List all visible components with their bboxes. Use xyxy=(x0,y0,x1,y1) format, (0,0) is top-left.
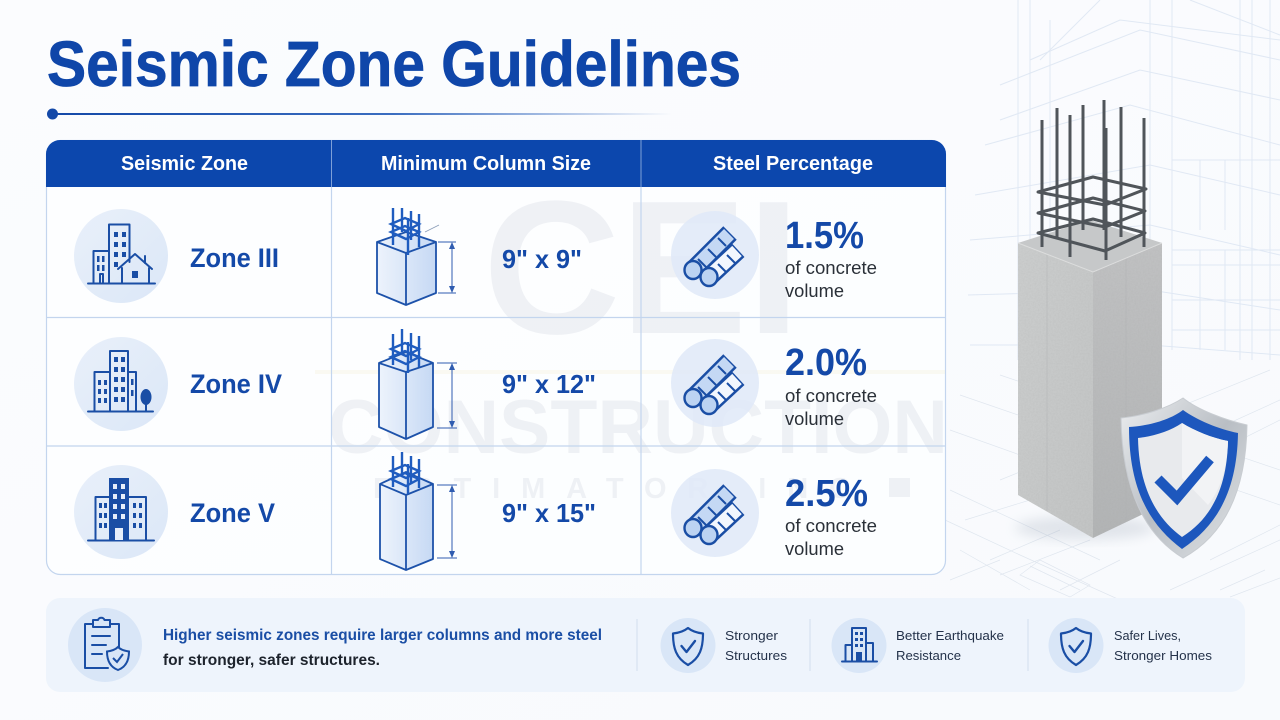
benefit: better earthquake resistance: Better Earthquake xyxy=(896,628,1004,643)
background: blueprint floor xyxy=(945,370,1280,600)
table header: Steel Percentage xyxy=(713,153,873,175)
icon: zone IV buildings xyxy=(74,337,168,431)
watermark: CONSTRUCTION xyxy=(328,385,948,470)
icon: column 9 x 12 xyxy=(379,329,457,439)
steel percentage: 1.5% xyxy=(785,215,864,257)
watermark xyxy=(315,162,948,505)
column size: 9" x 9" xyxy=(502,244,582,274)
icon: steel bars xyxy=(671,469,759,557)
icon: clipboard with shield xyxy=(68,608,142,682)
benefit: stronger structures: Stronger xyxy=(725,628,779,643)
icon: column 9 x 15 xyxy=(380,452,457,570)
zone label: Zone IV xyxy=(190,369,282,399)
icon: steel bars xyxy=(671,339,759,427)
illustration: concrete column with rebar xyxy=(1015,100,1162,540)
row: Zone III xyxy=(74,208,877,305)
watermark: CEI xyxy=(483,162,800,374)
column size: 9" x 15" xyxy=(502,498,596,528)
table header xyxy=(46,140,946,187)
steel percentage: volume xyxy=(785,409,844,429)
table header: Seismic Zone xyxy=(121,153,248,175)
column size: 9" x 12" xyxy=(502,369,596,399)
background: building wireframe xyxy=(968,0,1280,360)
steel percentage: 2.5% xyxy=(785,473,868,515)
icon: steel bars xyxy=(671,211,759,299)
icon: zone V buildings xyxy=(74,465,168,559)
steel percentage: of concrete xyxy=(785,258,877,278)
benefit: better earthquake resistance xyxy=(832,618,1004,673)
icon: column 9 x 9 xyxy=(377,208,456,305)
steel percentage: volume xyxy=(785,281,844,301)
benefit: stronger structures xyxy=(660,618,788,673)
zone label: Zone V xyxy=(190,498,275,528)
steel percentage xyxy=(785,342,877,429)
steel percentage: of concrete xyxy=(785,386,877,406)
steel percentage: volume xyxy=(785,539,844,559)
icon: zone III buildings xyxy=(74,209,168,303)
benefit: safer lives, stronger homes xyxy=(1048,618,1213,673)
title: Seismic Zone Guidelines xyxy=(47,28,741,100)
title rule xyxy=(47,108,672,120)
benefit: better earthquake resistance: Resistance xyxy=(896,648,961,663)
row: Zone IV xyxy=(74,329,877,439)
steel percentage xyxy=(785,473,877,559)
benefit: stronger structures: Structures xyxy=(725,648,788,663)
icon: shield with check xyxy=(1121,398,1247,558)
zone label: Zone III xyxy=(190,243,279,273)
table header: Minimum Column Size xyxy=(381,153,591,175)
benefit: safer lives, stronger homes: Safer Lives, xyxy=(1114,628,1181,643)
row: Zone V xyxy=(74,452,877,570)
steel percentage: 2.0% xyxy=(785,342,867,384)
panel: bottom summary xyxy=(46,598,1245,692)
table body xyxy=(46,140,946,574)
summary text: Higher seismic zones require larger columns and more steel xyxy=(163,627,602,644)
benefit: safer lives, stronger homes: Stronger Homes xyxy=(1114,648,1213,663)
watermark: ESTIMATOR INC xyxy=(373,473,850,505)
steel percentage: of concrete xyxy=(785,516,877,536)
summary text xyxy=(163,627,602,669)
table grid xyxy=(46,187,946,575)
summary text: for stronger, safer structures. xyxy=(163,652,380,669)
table panel xyxy=(46,140,948,575)
rebar cage xyxy=(1038,100,1146,260)
steel percentage xyxy=(785,215,877,301)
